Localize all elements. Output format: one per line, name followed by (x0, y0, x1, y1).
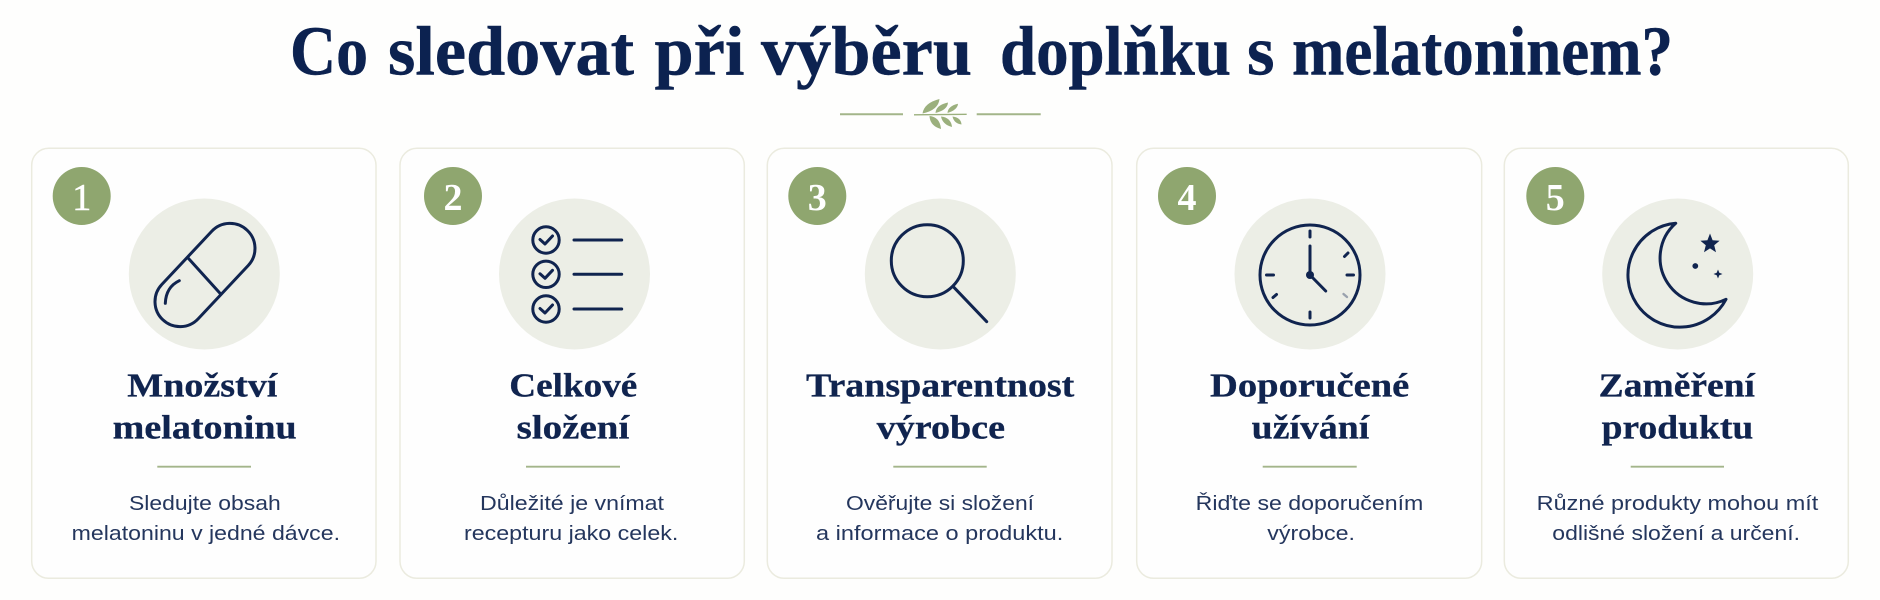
ornament: leaf divider (840, 99, 1041, 129)
title: sledovat (388, 14, 634, 90)
heading: složení (517, 409, 630, 446)
description: melatoninu v jedné dávce. (72, 522, 340, 545)
heading: produktu (1602, 409, 1753, 446)
description: recepturu jako celek. (464, 522, 678, 545)
panel: card 3 (767, 148, 1112, 578)
badge 5 (1526, 167, 1584, 225)
title: při (654, 14, 744, 90)
title: výběru (761, 14, 972, 90)
title: melatoninem? (1292, 14, 1673, 90)
description: Ověřujte si složení (846, 492, 1034, 515)
description (464, 492, 678, 545)
badge 2: 2 (444, 177, 462, 219)
badge 4: 4 (1178, 177, 1196, 219)
heading (1210, 368, 1409, 446)
badge 4 (1158, 167, 1216, 225)
heading (509, 368, 637, 446)
badge 1 (53, 167, 111, 225)
title: Co (290, 14, 368, 90)
panel: card 1 (32, 148, 376, 578)
heading: Transparentnost (806, 368, 1075, 405)
panel: card 4 (1137, 148, 1482, 578)
description (816, 492, 1063, 545)
badge 3 (788, 167, 846, 225)
badge 5: 5 (1546, 177, 1565, 219)
heading: Množství (127, 368, 278, 405)
description: Různé produkty mohou mít (1537, 492, 1819, 515)
heading: Doporučené (1210, 368, 1409, 405)
heading: melatoninu (113, 409, 297, 446)
badge 2 (424, 167, 482, 225)
heading (1599, 368, 1756, 446)
description: Řiďte se doporučením (1196, 492, 1423, 515)
description: výrobce. (1267, 522, 1355, 545)
icon: moon and stars (1602, 198, 1753, 350)
description: Důležité je vnímat (480, 492, 664, 515)
badge 3: 3 (808, 177, 827, 219)
icon: checklist (499, 198, 650, 350)
heading: užívání (1252, 409, 1370, 446)
description: a informace o produktu. (816, 522, 1063, 545)
panel: card 2 (400, 148, 744, 578)
heading: výrobce (877, 409, 1005, 446)
title: doplňku (1000, 14, 1231, 90)
description (72, 492, 340, 545)
heading (806, 368, 1075, 446)
icon: magnifier (865, 198, 1016, 350)
icon: capsule (129, 198, 280, 350)
icon: clock (1234, 198, 1386, 350)
description: Sledujte obsah (129, 492, 281, 515)
heading (113, 368, 297, 446)
panel: card 5 (1504, 148, 1848, 578)
heading: Zaměření (1599, 368, 1756, 405)
description (1537, 492, 1819, 545)
badge 1: 1 (72, 177, 91, 219)
title (290, 14, 1673, 90)
title: s (1247, 14, 1274, 90)
description (1196, 492, 1423, 545)
description: odlišné složení a určení. (1552, 522, 1800, 545)
heading: Celkové (509, 368, 637, 405)
